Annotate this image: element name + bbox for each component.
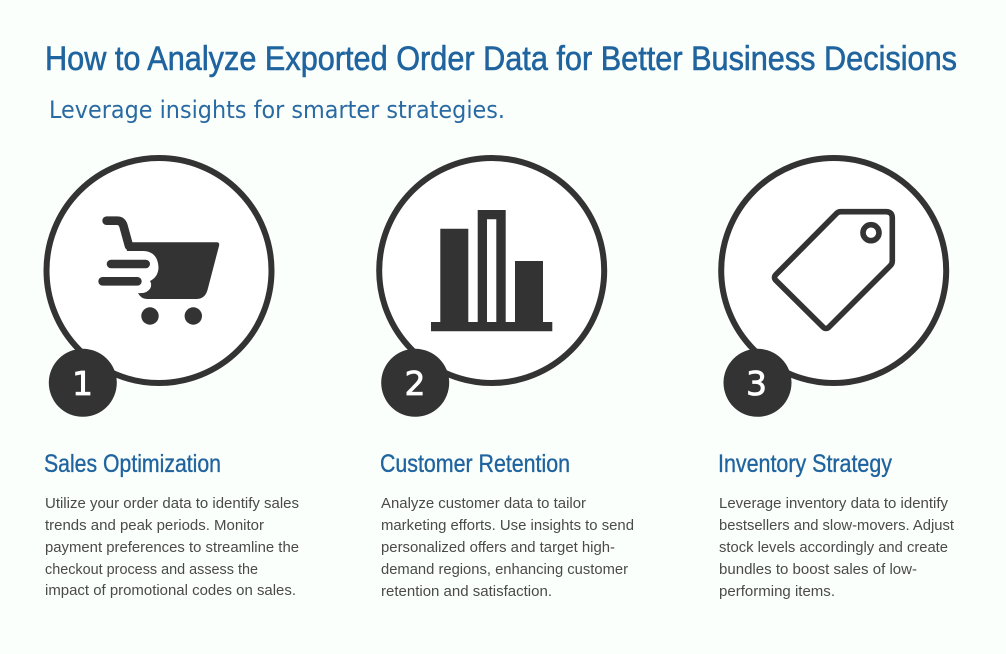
body text: [719, 496, 954, 600]
heading: Customer Retention: [380, 450, 570, 478]
body text: checkout process and assess the: [45, 562, 258, 578]
body text: retention and satisfaction.: [381, 584, 552, 600]
body text: trends and peak periods. Monitor: [45, 518, 264, 534]
icon: bar chart: [431, 210, 552, 331]
number badge 2: 2: [404, 364, 426, 403]
body text: marketing efforts. Use insights to send: [381, 518, 634, 534]
heading: Inventory Strategy: [718, 450, 892, 478]
body text: bestsellers and slow-movers. Adjust: [719, 518, 954, 534]
body text: payment preferences to streamline the: [45, 540, 299, 556]
number badge 2: [381, 349, 449, 417]
subtitle: Leverage insights for smarter strategies.: [49, 96, 505, 124]
body text: Leverage inventory data to identify: [719, 496, 949, 512]
body text: stock levels accordingly and create: [719, 540, 948, 556]
body text: bundles to boost sales of low-: [719, 562, 917, 578]
panel: sales optimization: [44, 158, 299, 599]
body text: [45, 496, 299, 599]
number badge 1: 1: [72, 364, 93, 403]
icon circle: [379, 158, 604, 383]
number badge 3: [724, 349, 792, 417]
body text: [381, 496, 634, 600]
body text: Utilize your order data to identify sales: [45, 496, 299, 512]
panel: customer retention: [379, 158, 634, 600]
body text: personalized offers and target high-: [381, 540, 615, 556]
heading: Sales Optimization: [44, 450, 221, 478]
icon circle: [46, 158, 272, 383]
body text: demand regions, enhancing customer: [381, 562, 628, 578]
panel: inventory strategy: [718, 158, 954, 600]
icon: price tag: [774, 212, 892, 328]
number badge 3: 3: [746, 364, 767, 403]
number badge 1: [49, 349, 117, 417]
body text: Analyze customer data to tailor: [381, 496, 586, 512]
body text: performing items.: [719, 584, 835, 600]
icon: shopping cart: [103, 221, 219, 325]
icon circle: [721, 158, 946, 383]
body text: impact of promotional codes on sales.: [45, 583, 296, 599]
